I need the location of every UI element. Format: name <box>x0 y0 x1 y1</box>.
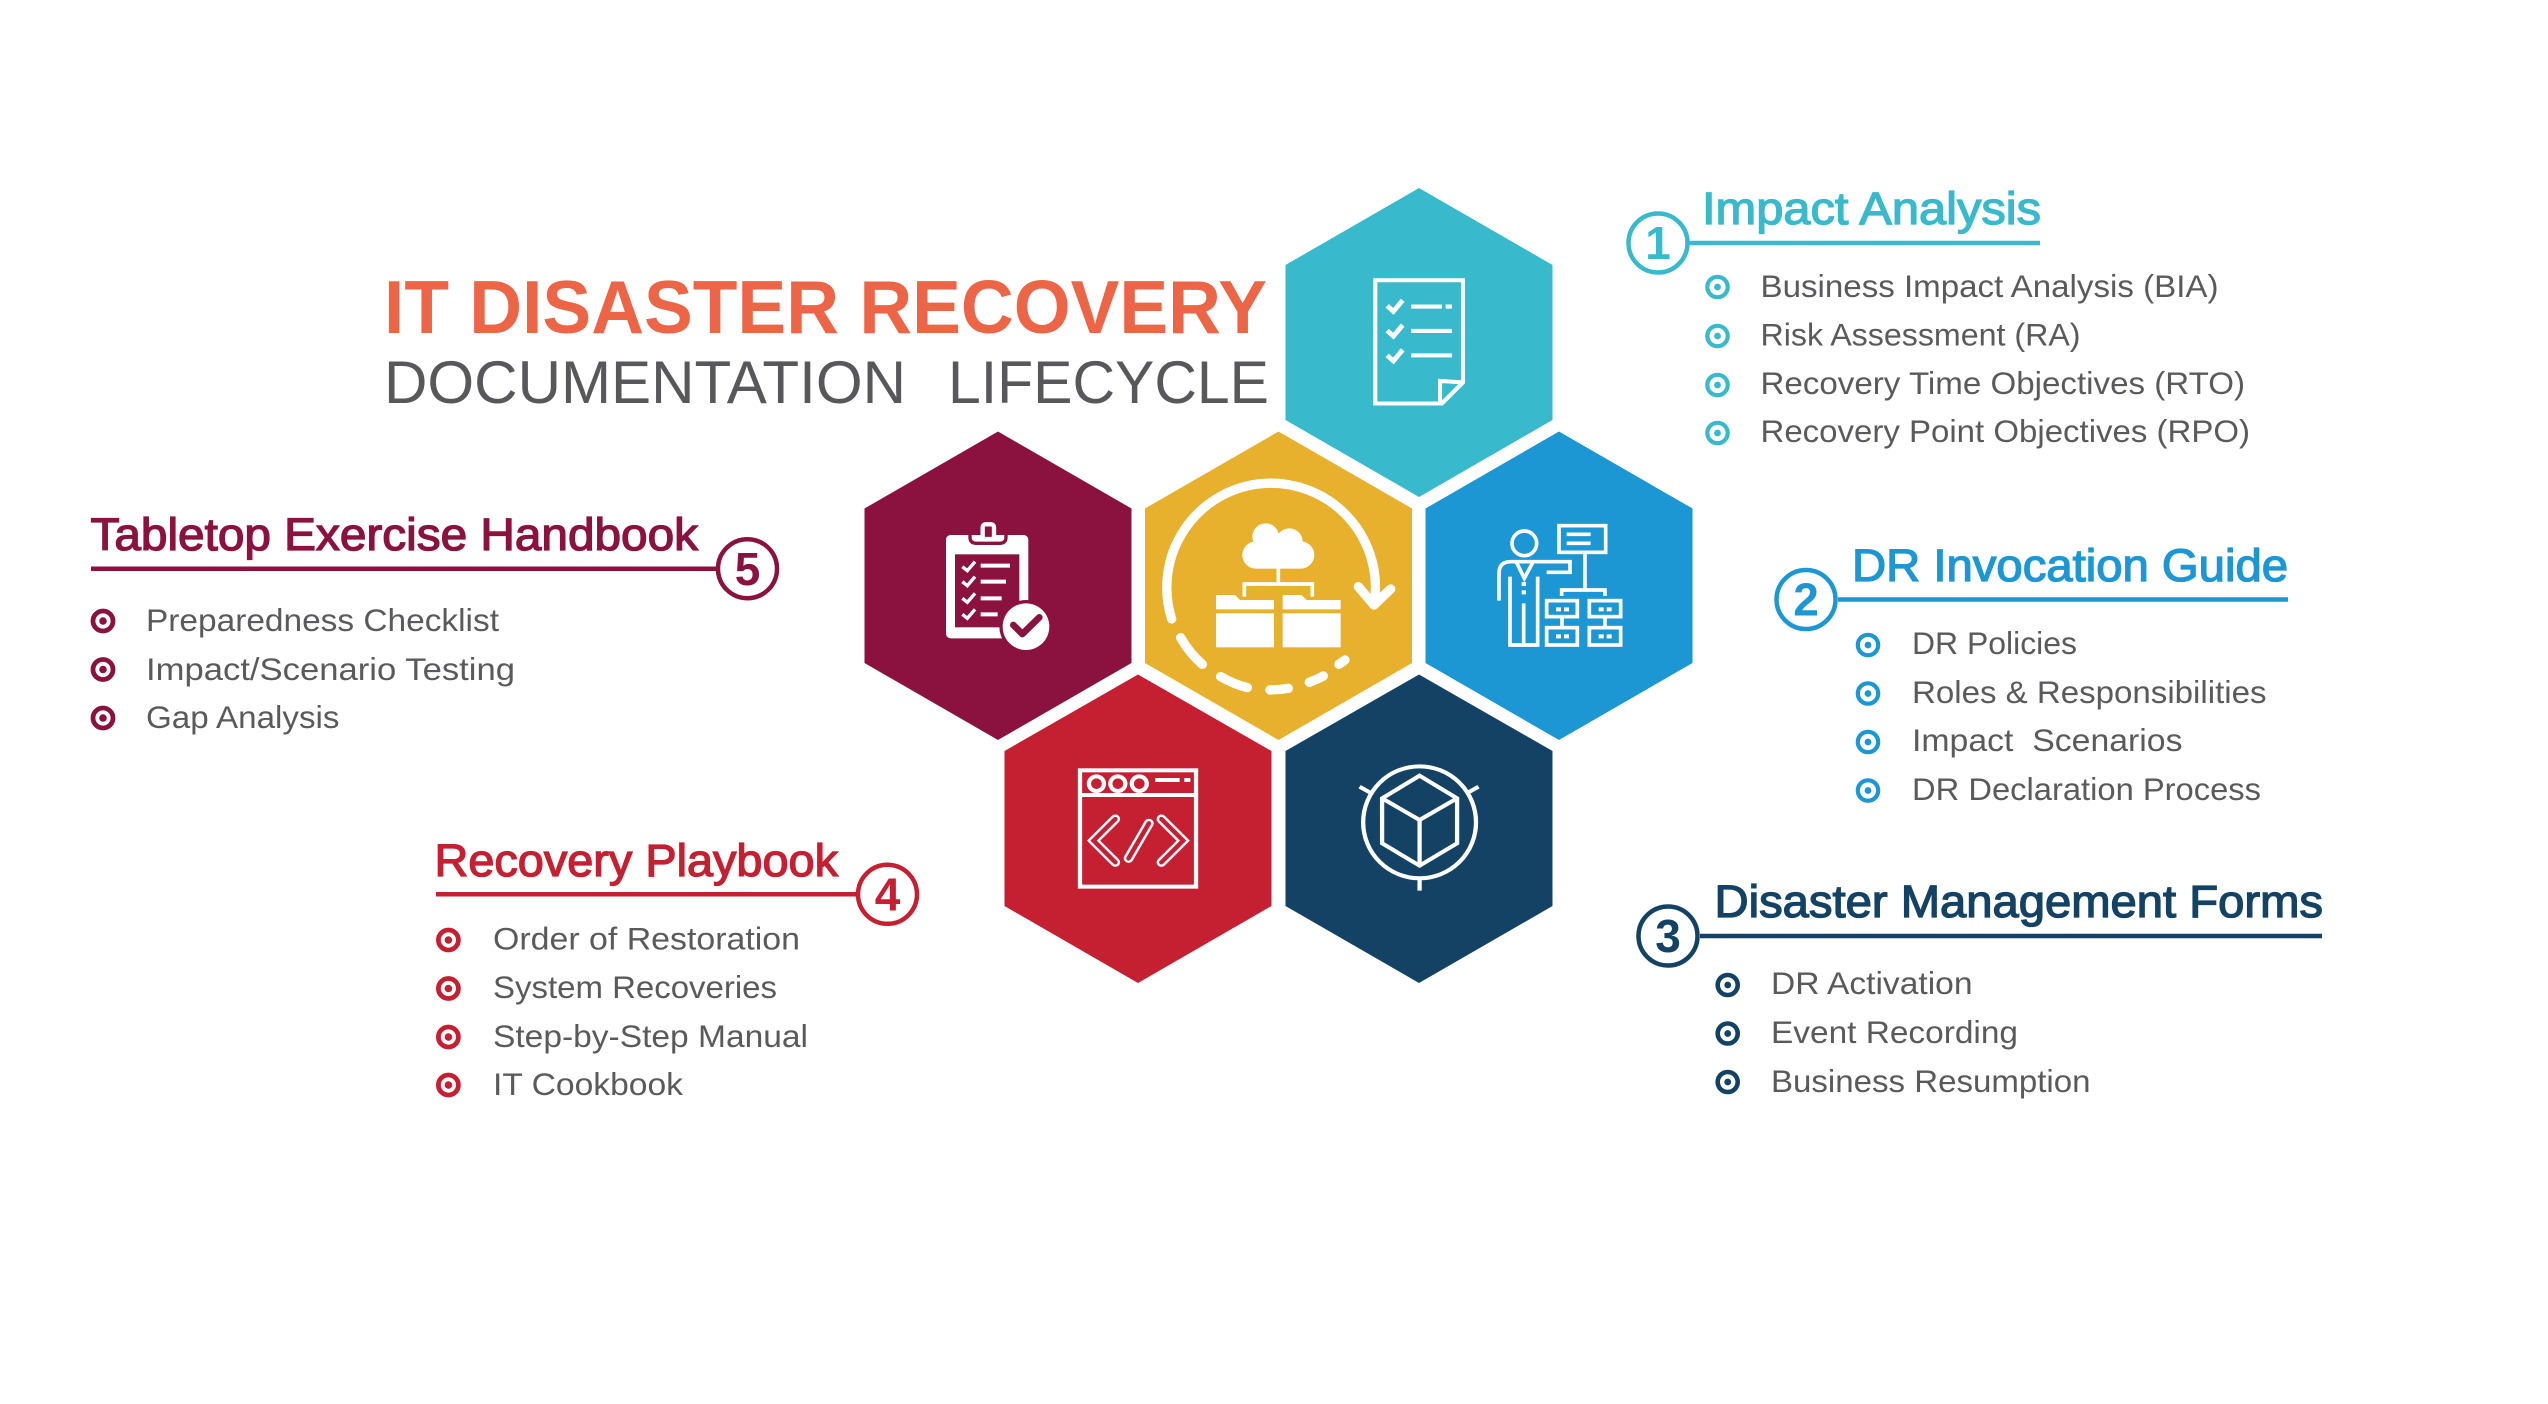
panel: 2 DR invocation guide: Roles & Responsibilities <box>1912 674 2266 710</box>
title: LIFECYCLE <box>948 349 1269 416</box>
panel: 2 DR invocation guide: DR Declaration Process <box>1912 771 2261 807</box>
panel: 4 recovery playbook: System Recoveries <box>493 969 777 1005</box>
panel: 4 recovery playbook: IT Cookbook <box>493 1066 683 1102</box>
panel: 1 impact analysis: Impact Analysis <box>1702 183 2041 234</box>
panel: 3 disaster management forms: Event Recording <box>1771 1014 2018 1050</box>
panel: 4 recovery playbook: Step-by-Step Manual <box>493 1018 808 1054</box>
panel: 3 disaster management forms: DR Activation <box>1771 965 1972 1001</box>
panel: 2 DR invocation guide: Impact Scenarios <box>1912 722 2182 758</box>
panel: 4 recovery playbook <box>434 835 917 1102</box>
panel: 5 tabletop exercise handbook: 5 <box>735 543 760 595</box>
hexagon: disaster management forms <box>1286 674 1552 983</box>
panel: 3 disaster management forms: 3 <box>1655 910 1681 962</box>
hexagon: center lifecycle <box>1145 432 1412 740</box>
icon: cloud folders with cycle arrow <box>1167 483 1391 690</box>
panel: 5 tabletop exercise handbook: Preparedness Checklist <box>146 602 499 638</box>
panel: 5 tabletop exercise handbook: Impact/Scenario Testing <box>146 651 515 687</box>
icon: cube in target <box>1360 766 1479 891</box>
icon: clipboard checklist <box>946 524 1053 653</box>
panel: 1 impact analysis: Business Impact Analysis (BIA) <box>1760 268 2218 304</box>
panel: 2 DR invocation guide: 2 <box>1793 574 1819 626</box>
panel: 1 impact analysis: Risk Assessment (RA) <box>1760 316 2080 352</box>
panel: 3 disaster management forms <box>1638 876 2323 1099</box>
title <box>384 265 1269 416</box>
panel: 4 recovery playbook: 4 <box>875 868 901 920</box>
panel: 1 impact analysis: Recovery Time Objectives (RTO) <box>1760 365 2245 401</box>
panel: 5 tabletop exercise handbook: Tabletop Exercise Handbook <box>90 509 699 560</box>
panel: 1 impact analysis: 1 <box>1645 217 1671 269</box>
title: IT DISASTER RECOVERY <box>384 265 1267 349</box>
panel: 1 impact analysis: Recovery Point Objectives (RPO) <box>1760 413 2250 449</box>
panel: 3 disaster management forms: Disaster Management Forms <box>1714 876 2323 927</box>
hexagon: impact analysis <box>1286 188 1552 497</box>
panel: 2 DR invocation guide <box>1776 540 2288 807</box>
panel: 2 DR invocation guide: DR Policies <box>1912 625 2077 661</box>
panel: 5 tabletop exercise handbook: Gap Analysis <box>146 699 340 735</box>
icon: code window <box>1080 770 1196 887</box>
hexagon: DR invocation guide <box>1426 432 1692 740</box>
panel: 1 impact analysis <box>1628 183 2250 449</box>
panel: 2 DR invocation guide: DR Invocation Guide <box>1852 540 2288 591</box>
panel: 5 tabletop exercise handbook <box>90 509 777 735</box>
icon: document checklist <box>1375 280 1463 403</box>
icon: presenter with org chart <box>1499 526 1621 645</box>
panel: 4 recovery playbook: Order of Restoration <box>493 920 800 956</box>
hexagon: tabletop exercise <box>864 432 1132 740</box>
hexagon: recovery playbook <box>1004 674 1272 983</box>
panel: 4 recovery playbook: Recovery Playbook <box>434 835 839 886</box>
title: DOCUMENTATION <box>384 349 906 416</box>
panel: 3 disaster management forms: Business Resumption <box>1771 1063 2090 1099</box>
